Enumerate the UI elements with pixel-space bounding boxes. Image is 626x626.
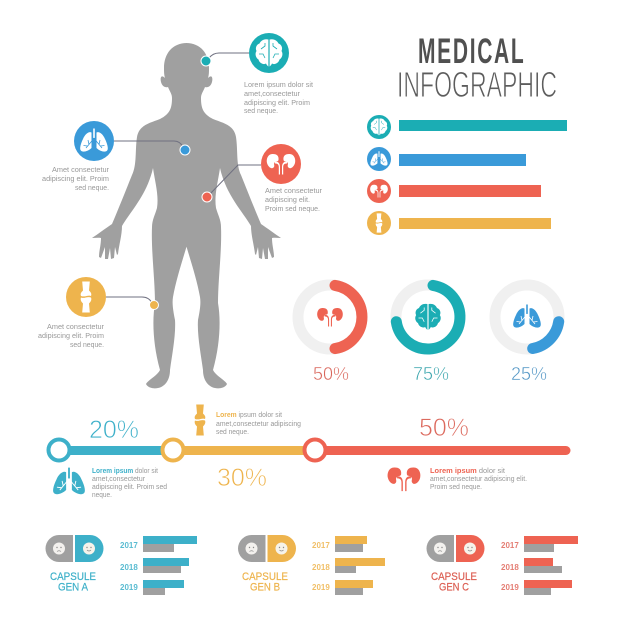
icon: capsule B	[238, 535, 296, 562]
capsule C name: CAPSULE	[431, 571, 477, 583]
title: MEDICAL	[418, 33, 525, 71]
text: kidney description: Amet consectetur	[265, 188, 323, 195]
donut: lungs 25%	[495, 285, 559, 384]
panel: capsule gen C	[426, 535, 578, 595]
panel: capsule gen A	[46, 535, 197, 595]
donut: lungs 25%: 25%	[511, 364, 547, 384]
segment: 20%	[59, 446, 173, 455]
capsule A name: CAPSULE	[50, 571, 96, 583]
text: bone description: Amet consectetur	[47, 324, 105, 331]
text: timeline bone	[216, 412, 301, 436]
text: bone description: sed neque.	[70, 342, 104, 349]
node: 50%	[304, 440, 326, 460]
text: lungs description: sed neque.	[75, 185, 109, 192]
text: timeline kidney: amet,consectetur adipiscing elit.	[430, 476, 527, 483]
text: brain description: Lorem ipsum dolor sit	[244, 82, 313, 89]
text: timeline lungs: adipiscing elit. Proim sed	[92, 484, 167, 491]
year labels B: 2018	[312, 563, 330, 572]
icon: timeline lungs	[53, 468, 85, 494]
connector: kidney	[209, 165, 261, 195]
bar chart: organs	[367, 115, 567, 235]
year labels A: 2019	[120, 583, 138, 592]
node: 20%	[48, 440, 70, 460]
year labels A: 2018	[120, 563, 138, 572]
year labels C: 2019	[501, 583, 519, 592]
panel: capsule gen B	[238, 535, 385, 595]
icon: timeline bone	[195, 404, 205, 436]
icon: capsule A	[46, 535, 104, 562]
text: timeline bone: Lorem ipsum dolor sit	[216, 412, 282, 419]
row: lungs	[367, 147, 526, 171]
text: brain description: amet,consectetur	[244, 91, 301, 98]
row: kidney	[367, 179, 541, 203]
year labels B: 2017	[312, 541, 330, 550]
connector: bone	[106, 297, 152, 303]
marker: lungs	[180, 145, 190, 155]
text: kidney description	[265, 188, 323, 213]
row: bone	[367, 211, 551, 235]
donut: kidney 50%	[298, 285, 362, 384]
text: timeline lungs: amet,consectetur	[92, 476, 146, 483]
body silhouette	[92, 43, 281, 388]
donut: kidney 50%: 50%	[313, 364, 349, 384]
title	[397, 33, 557, 105]
capsule B name: GEN B	[250, 582, 280, 594]
capsule C name: GEN C	[439, 582, 469, 594]
icon: bone badge	[66, 277, 106, 317]
icon: capsule C	[426, 535, 484, 562]
capsule C name	[431, 571, 477, 594]
year labels B: 2019	[312, 583, 330, 592]
segment: 30%	[173, 446, 315, 455]
year labels C: 2017	[501, 541, 519, 550]
icon: lungs badge	[74, 121, 114, 161]
marker: brain	[201, 56, 211, 66]
donut: brain 75%	[396, 285, 460, 384]
icon: timeline kidney	[388, 467, 420, 491]
text: brain description	[244, 82, 313, 115]
text: timeline bone: amet,consectetur adipiscing	[216, 421, 301, 428]
text: timeline bone: sed neque.	[216, 429, 249, 436]
text: kidney description: Proim sed neque.	[265, 206, 320, 213]
text: lungs description	[42, 167, 110, 192]
connector: brain	[209, 53, 249, 58]
text: timeline kidney: Proim sed neque.	[430, 484, 482, 491]
bars A	[143, 536, 197, 595]
label: 50%: 50%	[419, 414, 469, 442]
year labels A	[120, 541, 138, 592]
text: timeline lungs	[92, 468, 167, 499]
text: brain description: adipiscing elit. Proim	[244, 100, 310, 107]
timeline	[48, 440, 570, 460]
marker: bone	[150, 300, 158, 310]
icon: kidney badge	[261, 144, 301, 184]
text: timeline kidney: Lorem ipsum dolor sit	[430, 468, 505, 475]
text: brain description: sed neque.	[244, 108, 278, 115]
label: 30%: 30%	[217, 464, 267, 492]
marker: kidney	[202, 192, 212, 202]
capsule B name	[242, 571, 288, 594]
year labels C: 2018	[501, 563, 519, 572]
capsule B name: CAPSULE	[242, 571, 288, 583]
connector: lungs	[114, 141, 183, 147]
donut: brain 75%: 75%	[413, 364, 449, 384]
row: brain	[367, 115, 567, 139]
text: timeline lungs: neque.	[92, 492, 112, 499]
text: bone description: adipiscing elit. Proim	[38, 333, 104, 340]
year labels B	[312, 541, 330, 592]
text: lungs description: Amet consectetur	[52, 167, 110, 174]
segment: 50%	[315, 446, 570, 455]
bars B	[335, 536, 385, 595]
capsule A name: GEN A	[58, 582, 89, 594]
bars C	[524, 536, 578, 595]
text: kidney description: adipiscing elit.	[265, 197, 310, 204]
year labels C	[501, 541, 519, 592]
label: 20%: 20%	[89, 416, 139, 444]
text: timeline lungs: Lorem ipsum dolor sit	[92, 468, 158, 475]
text: bone description	[38, 324, 105, 349]
text: timeline kidney	[430, 468, 527, 491]
capsule A name	[50, 571, 96, 594]
node: 30%	[162, 440, 184, 460]
text: lungs description: adipiscing elit. Proim	[42, 176, 109, 183]
year labels A: 2017	[120, 541, 138, 550]
icon: brain badge	[249, 33, 289, 73]
